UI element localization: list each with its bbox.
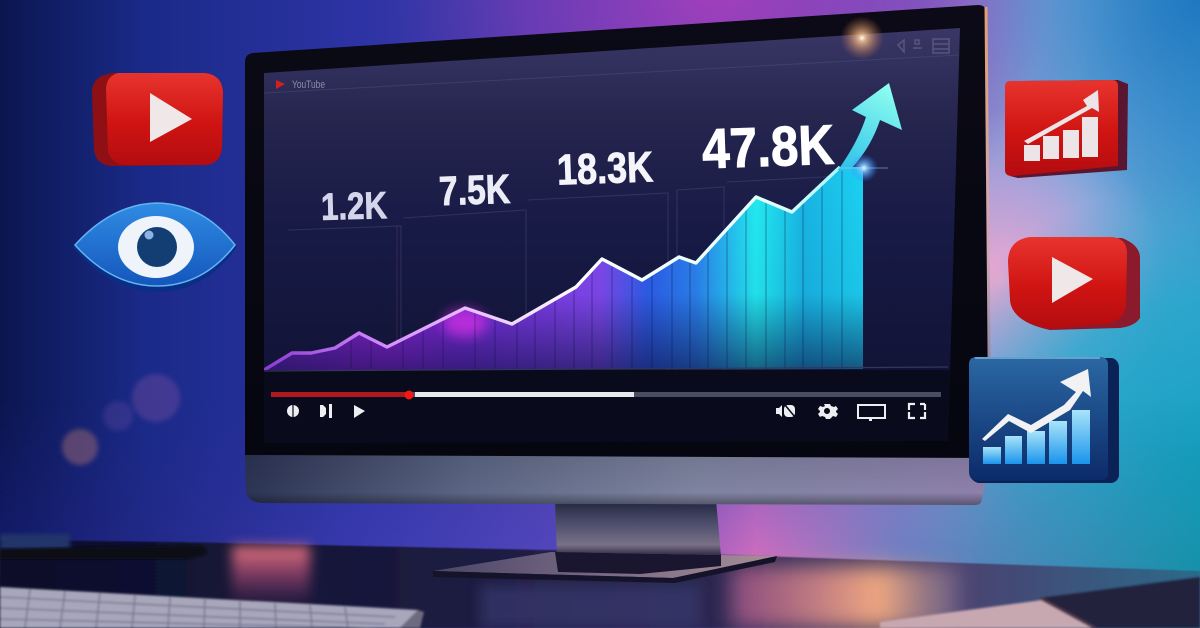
growth line — [264, 167, 840, 370]
stand neck — [555, 500, 721, 556]
left pen and phone on desk — [0, 534, 206, 559]
control bar background — [260, 370, 965, 445]
monitor bezel — [245, 5, 991, 458]
value label 7.5K: 7.5K — [438, 166, 511, 214]
icon: red play button left — [92, 73, 223, 166]
icon: red play button right — [1008, 237, 1140, 330]
bokeh lights lower left — [62, 374, 180, 465]
player controls left — [287, 404, 365, 418]
icon: red growth chart tile — [1005, 80, 1128, 178]
youtube logo label — [276, 80, 325, 89]
lens flare at top of monitor — [840, 16, 884, 60]
stand base — [433, 552, 777, 583]
icon: blue eye — [73, 203, 237, 292]
screen — [260, 20, 965, 445]
keyboard foreground — [0, 587, 424, 628]
monitor stand — [433, 500, 777, 583]
value label 1.2K: 1.2K — [321, 185, 388, 229]
growth arrow — [838, 83, 902, 172]
progress bar — [271, 390, 941, 400]
icon: blue growth chart tile — [969, 357, 1119, 483]
monitor chin — [245, 455, 991, 505]
desk surface with light reflections — [0, 540, 1200, 628]
notebook and paper foreground right — [880, 577, 1200, 628]
youtube logo label: YouTube — [292, 79, 325, 91]
value label 18.3K: 18.3K — [556, 143, 654, 195]
area chart with bars — [264, 167, 863, 370]
blue flare on chart — [838, 154, 888, 182]
monitor — [245, 5, 991, 505]
chart grid steps — [264, 55, 960, 370]
faint top-right player icons — [898, 39, 949, 53]
player controls right — [776, 404, 925, 421]
monitor edge highlight — [986, 7, 990, 458]
value label 47.8K: 47.8K — [701, 113, 835, 180]
